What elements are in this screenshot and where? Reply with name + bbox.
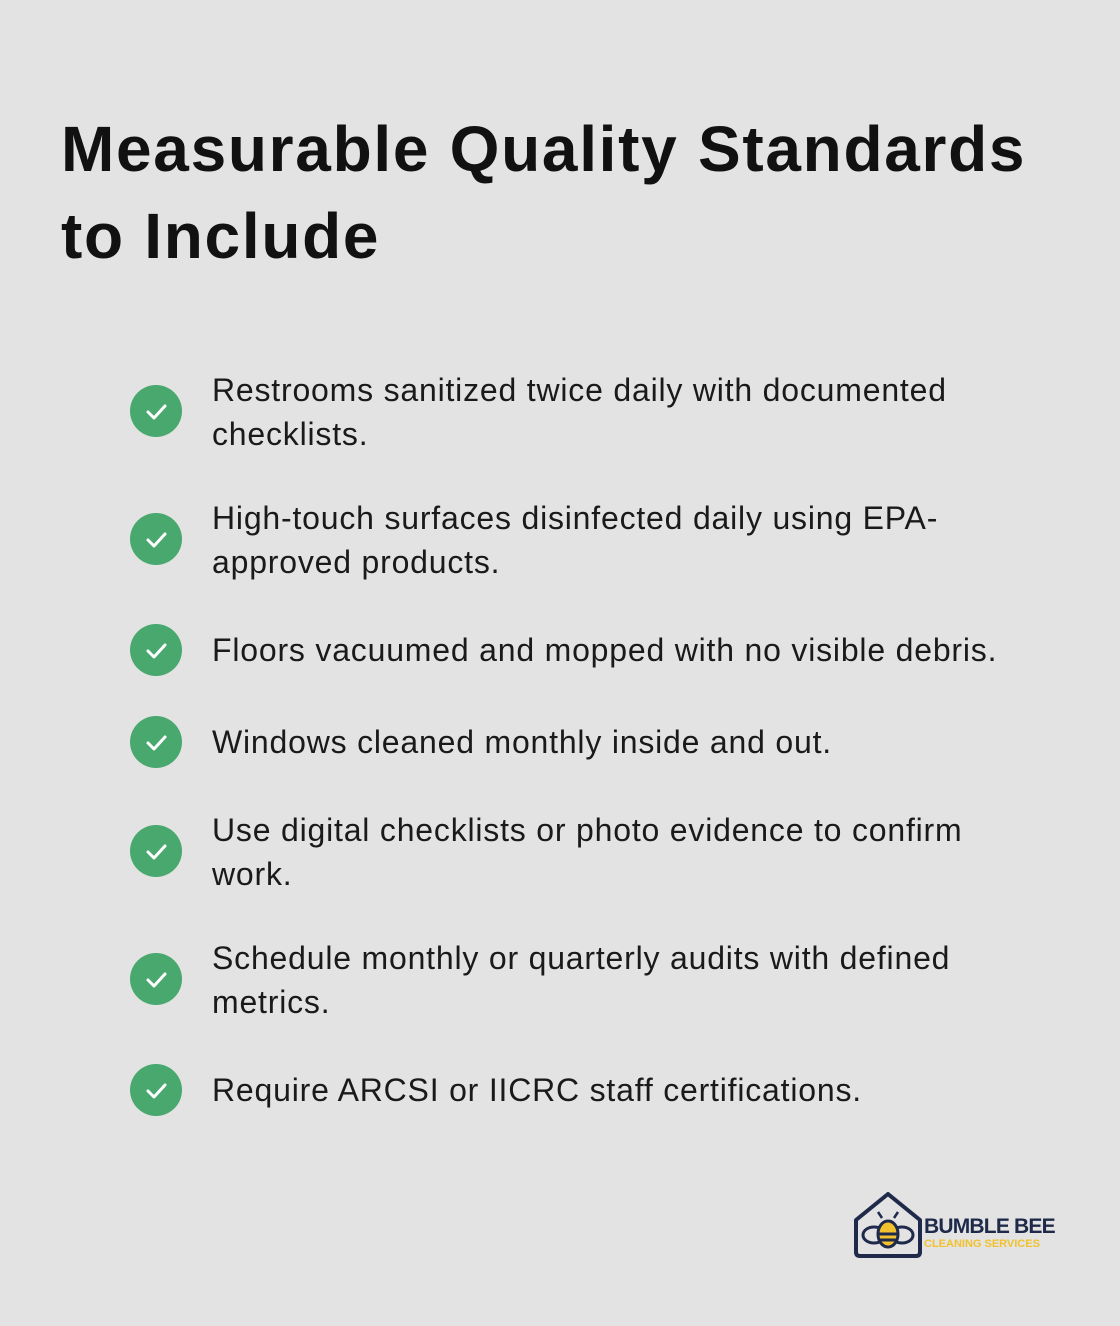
text: metrics. xyxy=(212,984,330,1020)
text: High-touch surfaces disinfected daily using EPA- xyxy=(212,500,938,536)
title: Measurable Quality Standards xyxy=(61,113,1026,185)
text: approved products. xyxy=(212,544,500,580)
text xyxy=(212,500,938,580)
text: Floors vacuumed and mopped with no visible debris. xyxy=(212,632,997,668)
item 1 xyxy=(130,372,947,452)
brand text: BUMBLE BEE xyxy=(924,1215,1055,1238)
text: work. xyxy=(212,856,292,892)
icon: check xyxy=(130,825,182,877)
icon: check xyxy=(130,624,182,676)
title: to Include xyxy=(61,200,380,272)
brand text: CLEANING SERVICES xyxy=(924,1238,1040,1250)
brand text xyxy=(924,1215,1055,1250)
icon: check xyxy=(130,953,182,1005)
text xyxy=(212,812,962,892)
item 4 xyxy=(130,716,832,768)
text xyxy=(212,372,947,452)
icon: check xyxy=(130,385,182,437)
icon: check xyxy=(130,716,182,768)
icon: check xyxy=(130,513,182,565)
logo xyxy=(854,1192,1055,1258)
title xyxy=(61,113,1026,272)
text xyxy=(212,940,950,1020)
text: Schedule monthly or quarterly audits with defined xyxy=(212,940,950,976)
item 3 xyxy=(130,624,997,676)
item 5 xyxy=(130,812,962,892)
item 2 xyxy=(130,500,938,580)
item 6 xyxy=(130,940,950,1020)
icon: check xyxy=(130,1064,182,1116)
text: Require ARCSI or IICRC staff certifications. xyxy=(212,1072,862,1108)
text: checklists. xyxy=(212,416,368,452)
text: Use digital checklists or photo evidence to confirm xyxy=(212,812,962,848)
icon: house bee xyxy=(854,1192,922,1258)
text: Windows cleaned monthly inside and out. xyxy=(212,724,832,760)
item 7 xyxy=(130,1064,862,1116)
text: Restrooms sanitized twice daily with documented xyxy=(212,372,947,408)
